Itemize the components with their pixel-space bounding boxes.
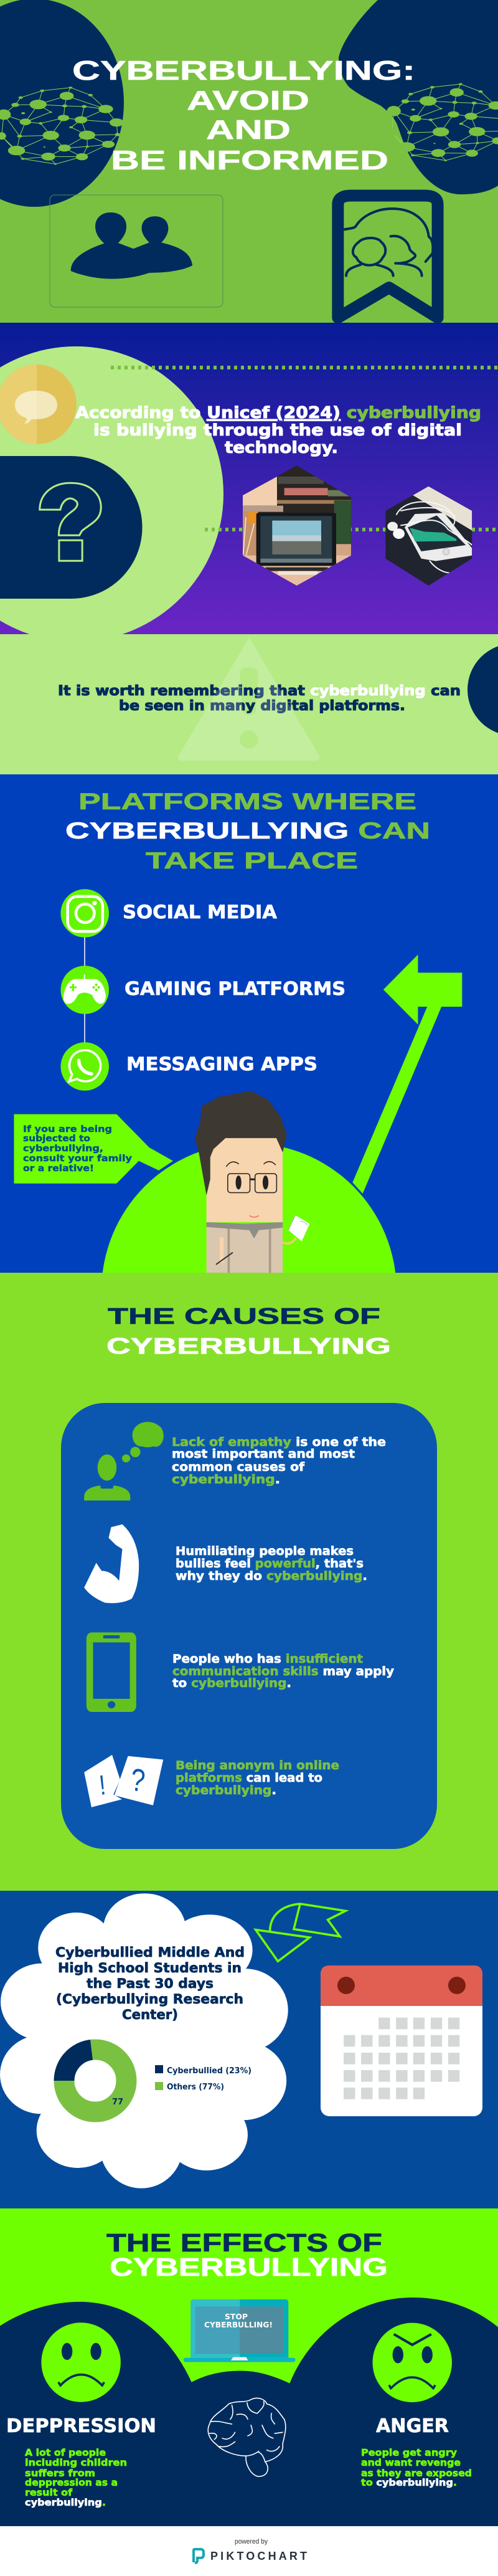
title background [0,0,498,323]
statistics background [0,1891,498,2208]
icon: angry face [372,2323,452,2402]
chart title: (Cyberbullying Research [56,1992,243,2007]
platform labels: MESSAGING APPS [126,1053,317,1075]
platforms heading: PLATFORMS WHERE [78,789,416,814]
illustration: man with glasses and book [195,1091,309,1276]
anger text: as they are exposed [361,2468,472,2479]
white cloud [0,1893,288,2189]
depression text: including children [25,2457,127,2468]
cause text: power: why they do cyberbullying . [176,1570,367,1583]
section: statistics [0,1891,498,2208]
callout: advice: consult your family [23,1154,133,1164]
chart title: Center) [122,2007,178,2022]
callout: advice: cyberbullying, [23,1144,103,1154]
icon: piktochart logo [194,2549,204,2563]
platform labels: GAMING PLATFORMS [125,978,345,999]
cause text: empathy: Lack of empathy is one of the [172,1436,386,1449]
effects background [0,2208,498,2526]
donut chart: 77 [112,2098,123,2107]
cause text: power: Humiliating people makes [176,1545,354,1558]
main title [72,55,415,176]
definition text: is bullying through the use of digital [93,421,462,440]
callout: advice: subjected to [23,1134,90,1144]
icon: sad face [41,2322,121,2402]
icon: laptop stop cyberbullying [184,2299,295,2362]
icon: laptop stop cyberbullying: STOP [225,2312,248,2321]
icon: game controller [60,966,109,1014]
chart legend [155,2065,251,2092]
connector lines [84,934,85,1043]
platforms background [0,774,498,1273]
icon: warning triangle watermark [178,637,319,761]
cause text: power: bullies feel powerful , that's [176,1557,364,1571]
icon: exclamation and question cards: ? [129,1761,147,1799]
icon: brain outline [208,2398,286,2476]
platforms heading: CYBERBULLYING CAN [65,818,430,844]
dotted line lower [205,528,498,531]
piktochart wordmark: PIKTOCHART [210,2550,307,2562]
chart legend: Others (77%) [167,2082,224,2092]
navy rounded question panel [0,456,142,599]
cause text: communication [172,1653,394,1690]
depression text [25,2447,127,2508]
left network globe [0,87,123,165]
depression text: suffers from [25,2468,95,2479]
callout: advice: or a relative! [23,1164,94,1174]
callout: advice [14,1114,173,1184]
section: reminder [0,634,498,774]
cause text: anonymity: platforms can lead to [176,1772,322,1785]
anger text: and want revenge [361,2457,461,2468]
chart title: Cyberbullied Middle And [55,1945,245,1960]
icon: bookmark with family [338,196,438,318]
causes heading: THE CAUSES OF [108,1303,380,1329]
photo: laptop hexagon [243,466,351,586]
definition gradient background [0,323,498,634]
reminder text: be seen in many digital platforms. [119,698,405,714]
platforms heading: TAKE PLACE [146,848,358,873]
cause text: empathy [172,1436,386,1486]
definition text: technology. [225,439,338,457]
reminder background [0,634,498,774]
powered by label: powered by [235,2538,268,2545]
reminder text: It is worth remembering that cyberbullying can [58,683,461,699]
icon: flexed arm [84,1524,139,1603]
chart title [55,1945,245,2022]
icon: paper boat flag outline [256,1904,345,1961]
callout: advice: If you are being [23,1124,112,1134]
dotted line upper [111,366,498,369]
chart title: the Past 30 days [87,1976,214,1991]
depression text: deppression as a [25,2477,118,2488]
causes heading: CYBERBULLYING [106,1333,391,1359]
icon: instagram [60,889,109,938]
arrow [352,954,462,1194]
section: platforms [0,774,498,1438]
cause text: power [176,1545,367,1583]
footer: powered by piktochart [0,2526,498,2576]
depression text: result of [25,2487,72,2498]
anger heading: ANGER [376,2415,449,2437]
icon: exclamation and question cards: ! [98,1769,107,1801]
definition text [75,404,481,457]
footer background [0,2526,498,2576]
effects heading [106,2228,388,2281]
section: causes [0,1273,498,1891]
navy hills [0,2298,498,2526]
anger text: to cyberbullying . [361,2477,457,2488]
cause text: communication: People who has insufficient [172,1653,363,1666]
depression heading: DEPPRESSION [6,2415,156,2437]
cause text: communication: communication skills may apply [172,1665,394,1678]
section: title [0,0,498,323]
reminder text [58,683,461,714]
photo: phone and earphones hexagon [385,486,472,586]
right navy blob [339,0,498,194]
left navy blob [0,0,124,207]
cause text: empathy: cyberbullying . [172,1473,280,1486]
anger text [361,2447,472,2488]
depression text: cyberbullying . [25,2497,106,2508]
icon: calendar [321,1965,482,2116]
donut chart [64,2050,126,2112]
definition text: According to Unicef (2024) cyberbullying [75,404,481,422]
icon: speech bubble badge [0,364,77,444]
main title: AVOID [187,85,309,116]
cause text: anonymity: Being anonym in online [176,1759,339,1772]
icon: whatsapp [60,1042,109,1091]
cause text: anonymity [176,1759,339,1797]
effects heading: THE EFFECTS OF [106,2228,382,2257]
cause text: anonymity: cyberbullying . [176,1784,276,1797]
icon: exclamation and question cards [84,1755,163,1807]
icon: two people [71,212,192,279]
icon: thinking head [84,1422,164,1501]
cause text: empathy: common causes of [172,1461,305,1474]
section: effects [0,2208,498,2526]
platform labels [123,901,345,1075]
chart legend: Cyberbullied (23%) [167,2066,251,2076]
icon: laptop stop cyberbullying: CYBERBULLING! [204,2320,273,2329]
green hill [101,1143,397,1438]
cause text: communication: to cyberbullying . [172,1677,291,1690]
causes background [0,1273,498,1891]
navy circle at right edge [467,644,498,736]
light green circle [0,346,223,642]
platform labels: SOCIAL MEDIA [123,901,278,923]
main title: CYBERBULLYING: [72,55,415,86]
section: definition [0,323,498,642]
effects heading: CYBERBULLYING [110,2253,388,2281]
main title: AND [206,115,291,145]
icon: question mark [40,483,101,561]
icon: smartphone [87,1632,136,1712]
thin frame around people icon [50,195,223,307]
platforms heading [65,789,430,873]
panel: causes list [61,1403,437,1849]
depression text: A lot of people [25,2447,106,2458]
main title: BE INFORMED [111,145,388,176]
causes heading [106,1303,391,1359]
right network globe [387,83,498,161]
chart title: High School Students in [58,1961,242,1975]
cause text: empathy: most important and most [172,1448,355,1461]
anger text: People get angry [361,2447,457,2458]
